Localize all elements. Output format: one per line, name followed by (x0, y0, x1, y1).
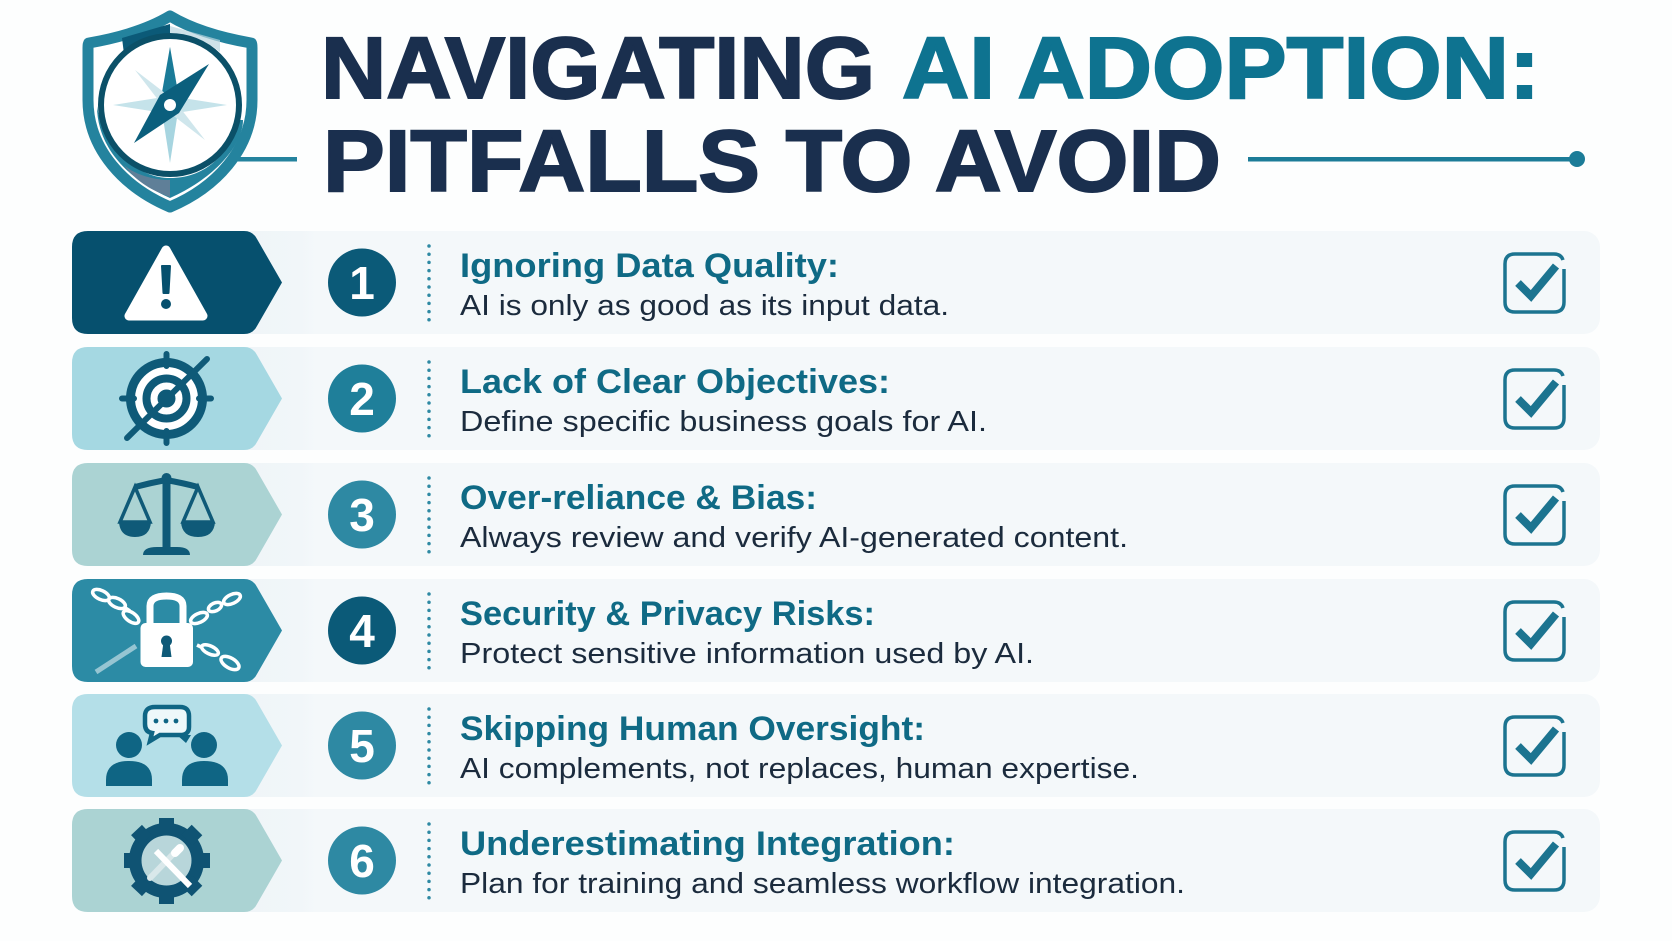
row 1: ignoring data quality (72, 231, 1600, 334)
row 6: underestimating integration (72, 809, 1600, 912)
title line with end dot (1248, 151, 1585, 167)
text: underestimating integration (460, 825, 1185, 900)
text: lack of clear objectives: Lack of Clear Objectives: (460, 363, 890, 401)
text: over-reliance and bias (460, 479, 1128, 554)
number badge 4 (328, 596, 396, 664)
title: AI ADOPTION: (902, 20, 1540, 117)
row 5: skipping human oversight (72, 694, 1600, 797)
text: ignoring data quality (460, 247, 949, 322)
icon: balance scales (119, 473, 215, 555)
title (321, 20, 1540, 210)
text: skipping human oversight: Skipping Human Oversight: (460, 710, 925, 748)
number badge 6: 6 (349, 835, 375, 887)
icon: checkbox (1505, 832, 1564, 890)
number badge 5: 5 (349, 720, 375, 772)
text: skipping human oversight (460, 710, 1139, 785)
row 3: over-reliance and bias (72, 463, 1600, 566)
icon: crossed target (122, 354, 211, 443)
shield connector line (236, 157, 297, 162)
icon: checkbox (1505, 370, 1564, 428)
number badge 6 (328, 826, 396, 894)
text: security and privacy risks: Protect sensitive information used by AI. (460, 638, 1034, 670)
number badge 2: 2 (349, 373, 375, 425)
text: underestimating integration: Underestimating Integration: (460, 825, 955, 863)
number badge 3 (328, 480, 396, 548)
number badge 3: 3 (349, 489, 375, 541)
text: lack of clear objectives (460, 363, 987, 438)
icon: checkbox (1505, 254, 1564, 312)
text: skipping human oversight: AI complements, not replaces, human expertise. (460, 753, 1139, 785)
icon: checkbox (1505, 717, 1564, 775)
title: PITFALLS TO AVOID (323, 113, 1221, 210)
number badge 2 (328, 364, 396, 432)
row 2: lack of clear objectives (72, 347, 1600, 450)
text: underestimating integration: Plan for training and seamless workflow integration. (460, 868, 1185, 900)
text: security and privacy risks: Security & Privacy Risks: (460, 595, 875, 633)
text: lack of clear objectives: Define specific business goals for AI. (460, 406, 987, 438)
text: over-reliance and bias: Always review and verify AI-generated content. (460, 522, 1128, 554)
icon: two people with speech bubble (106, 707, 228, 786)
number badge 5 (328, 712, 396, 780)
number badge 1: 1 (349, 257, 375, 309)
icon: shield with compass (88, 16, 252, 207)
icon: gear with tools (124, 818, 210, 904)
icon: warning triangle (129, 250, 203, 316)
number badge 4: 4 (349, 605, 375, 657)
text: ignoring data quality: Ignoring Data Quality: (460, 247, 839, 285)
number badge 1 (328, 248, 396, 316)
text: ignoring data quality: AI is only as good as its input data. (460, 290, 949, 322)
text: over-reliance and bias: Over-reliance & Bias: (460, 479, 817, 517)
row 4: security and privacy risks (72, 579, 1600, 682)
icon: checkbox (1505, 602, 1564, 660)
icon: checkbox (1505, 486, 1564, 544)
text: security and privacy risks (460, 595, 1034, 670)
title: NAVIGATING (321, 20, 875, 117)
icon: padlock with broken chains (91, 587, 242, 672)
